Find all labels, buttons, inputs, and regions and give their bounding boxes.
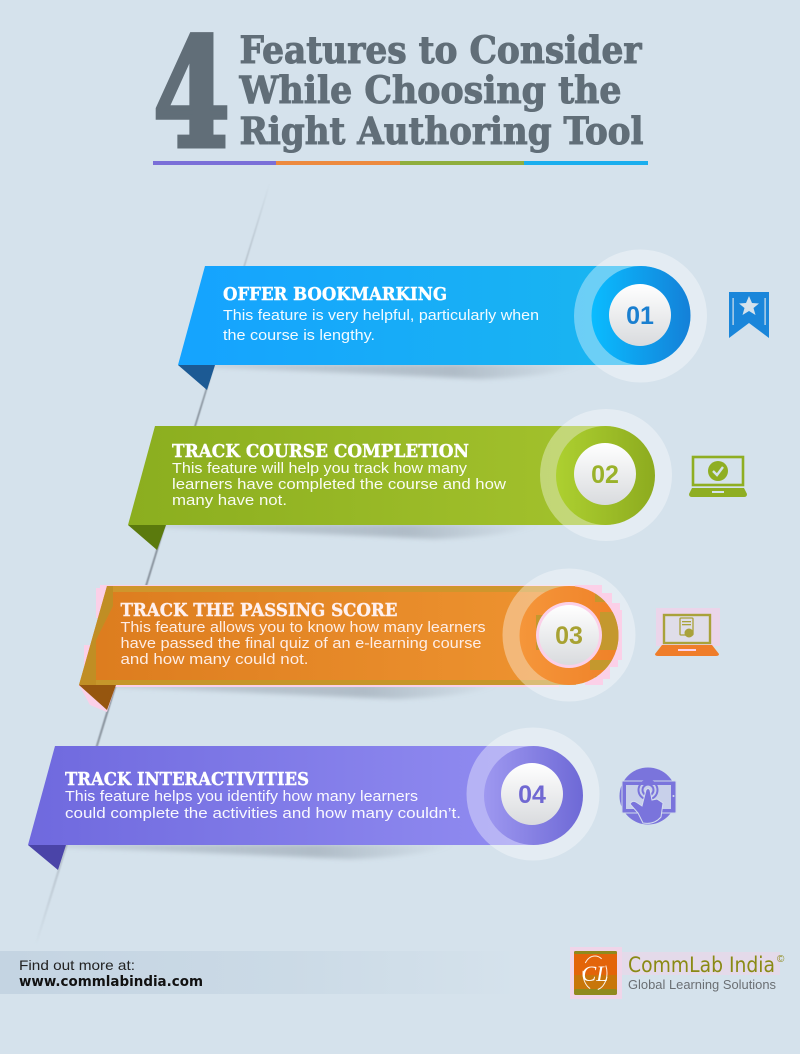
icon: laptop with certificate (655, 608, 720, 656)
heading: TRACK COURSE COMPLETION (172, 441, 469, 462)
ring (556, 426, 655, 525)
logo wordmark: © (777, 954, 785, 965)
heading: OFFER BOOKMARKING (223, 284, 447, 305)
olive blocks on ring (536, 594, 618, 678)
icon: bookmark with star (729, 292, 769, 338)
body text: learners have completed the course and how (172, 476, 506, 493)
pink blocks around ring (575, 585, 622, 685)
panel: feature 4 track interactivities (28, 728, 600, 870)
title text (239, 28, 644, 153)
ribbon shadow (210, 364, 585, 379)
logo wordmark (622, 952, 785, 992)
heading: TRACK INTERACTIVITIES (65, 769, 309, 790)
halo (502, 568, 636, 702)
ribbon fold (178, 365, 215, 390)
ribbon (128, 426, 654, 525)
logo wordmark: Global Learning Solutions (628, 977, 776, 992)
ribbon fold (128, 525, 166, 550)
panel: feature 1 offer bookmarking (178, 250, 707, 390)
number badge: 01 (626, 302, 654, 330)
ribbon (178, 266, 690, 365)
body text: This feature is very helpful, particularly when (223, 307, 539, 324)
ribbon shadow (60, 844, 455, 859)
footer text: Find out more at: (19, 957, 135, 973)
number badge (536, 602, 602, 668)
number badge: 03 (555, 622, 583, 650)
halo (466, 728, 600, 860)
body text (65, 788, 461, 822)
body text: This feature helps you identify how many learners (65, 788, 418, 805)
logo mark (570, 947, 622, 999)
logo: CommLab India (570, 947, 785, 999)
title numeral 4: 4 (153, 6, 230, 182)
title text: Right Authoring Tool (240, 109, 644, 153)
ochre compression strips on ribbon (79, 586, 582, 685)
footer text (19, 957, 203, 990)
ring (484, 746, 583, 845)
number badge (609, 284, 671, 346)
diagonal line behind ribbons (34, 183, 270, 945)
body text (223, 307, 539, 344)
title text: While Choosing the (239, 68, 622, 112)
panel: feature 3 track the passing score (79, 568, 636, 712)
ribbon shadow (112, 684, 500, 699)
body text: and how many could not. (120, 651, 308, 668)
body text: many have not. (172, 492, 287, 509)
number badge: 02 (591, 461, 619, 489)
logo wordmark: CommLab India (628, 953, 775, 977)
ribbon shadow (160, 524, 540, 539)
ribbon fold (28, 845, 66, 870)
number badge: 04 (518, 781, 546, 809)
body text: the course is lengthy. (223, 327, 375, 344)
panel: feature 2 track course completion (128, 409, 672, 550)
body text: This feature will help you track how many (172, 460, 468, 477)
ribbon (79, 586, 618, 685)
halo (574, 250, 707, 382)
number badge (501, 763, 563, 825)
logo mark: CL (582, 961, 608, 986)
body text: could complete the activities and how many couldn’t. (65, 805, 461, 822)
ribbon (28, 746, 582, 845)
title (153, 6, 644, 182)
halo (540, 409, 672, 541)
title text: Features to Consider (240, 28, 642, 72)
compression halo behind ribbon (79, 585, 590, 712)
body text (172, 460, 506, 509)
ring (520, 586, 618, 685)
body text: This feature allows you to know how many learners (120, 619, 486, 636)
title rule in four colours (153, 161, 648, 165)
ribbon fold (79, 685, 116, 710)
icon: laptop with check mark (689, 457, 747, 497)
ring (592, 266, 690, 365)
footer strip (0, 951, 520, 994)
body text (120, 619, 486, 668)
heading: TRACK THE PASSING SCORE (120, 600, 398, 621)
body text: have passed the final quiz of an e-learning course (120, 635, 482, 652)
icon: touch tablet (620, 768, 676, 824)
footer text: www.commlabindia.com (19, 974, 203, 990)
number badge (574, 443, 636, 505)
